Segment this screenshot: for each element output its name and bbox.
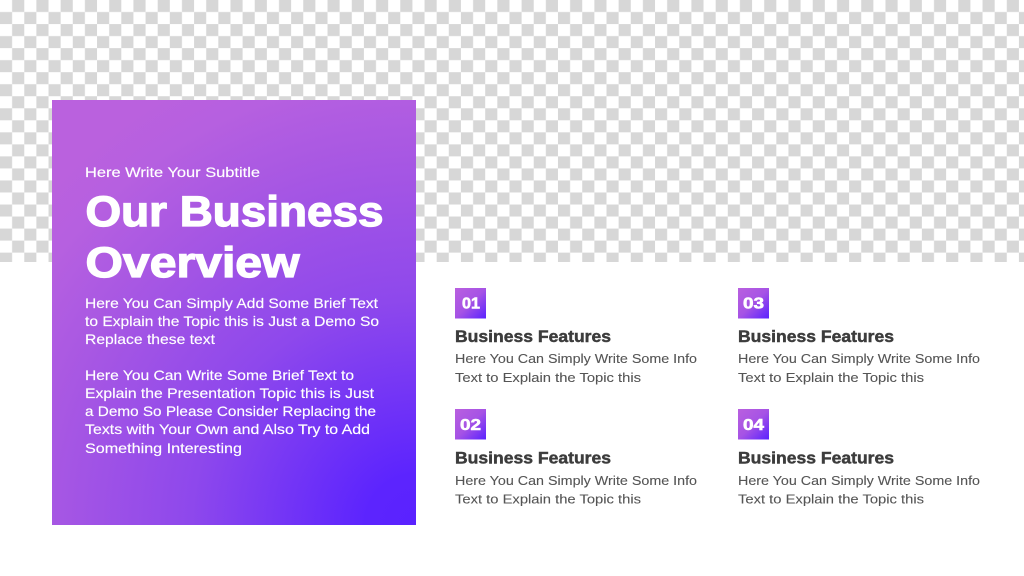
description 02 [455,473,697,506]
badge 02: 02 [460,417,481,434]
intro paragraph [85,295,379,347]
badge 03: 03 [743,296,764,312]
description 03: Here You Can Simply Write Some Info [738,351,980,366]
intro paragraph: Here You Can Simply Add Some Brief Text [85,295,378,311]
description 01: Here You Can Simply Write Some Info [455,351,697,366]
detail paragraph: Texts with Your Own and Also Try to Add [85,421,370,437]
description 01 [455,351,697,385]
title: Our Business [86,188,384,236]
detail paragraph: Here You Can Write Some Brief Text to [85,367,354,383]
detail paragraph: Something Interesting [85,440,242,456]
description 04: Here You Can Simply Write Some Info [738,473,980,488]
detail paragraph: a Demo So Please Consider Replacing the [85,403,376,419]
badge 01: 01 [462,296,480,312]
description 03 [738,351,980,385]
intro paragraph: Replace these text [85,331,215,347]
intro paragraph: to Explain the Topic this is Just a Demo So [85,313,379,329]
panel: business overview card [52,100,416,525]
feature 03 [738,288,980,385]
badge 04: 04 [743,417,764,434]
feature 04 [738,409,980,506]
feature 01 [455,288,697,385]
card background [52,100,416,525]
description 03: Text to Explain the Topic this [738,370,925,385]
subtitle: Here Write Your Subtitle [85,165,260,180]
description 04: Text to Explain the Topic this [738,492,925,506]
heading 04: Business Features [738,450,894,468]
badge 04 [738,409,769,440]
heading 02: Business Features [455,450,611,468]
description 01: Text to Explain the Topic this [455,370,642,385]
checkerboard background [0,0,1024,262]
badge 02 [455,409,486,440]
title [86,188,384,287]
badge 01 [455,288,486,318]
detail paragraph [85,367,376,456]
description 04 [738,473,980,506]
detail paragraph: Explain the Presentation Topic this is Just [85,385,374,401]
badge 03 [738,288,769,318]
description 02: Here You Can Simply Write Some Info [455,473,697,488]
feature 02 [455,409,697,506]
heading 01: Business Features [455,328,611,346]
description 02: Text to Explain the Topic this [455,492,642,506]
title: Overview [86,239,300,287]
heading 03: Business Features [738,328,894,346]
